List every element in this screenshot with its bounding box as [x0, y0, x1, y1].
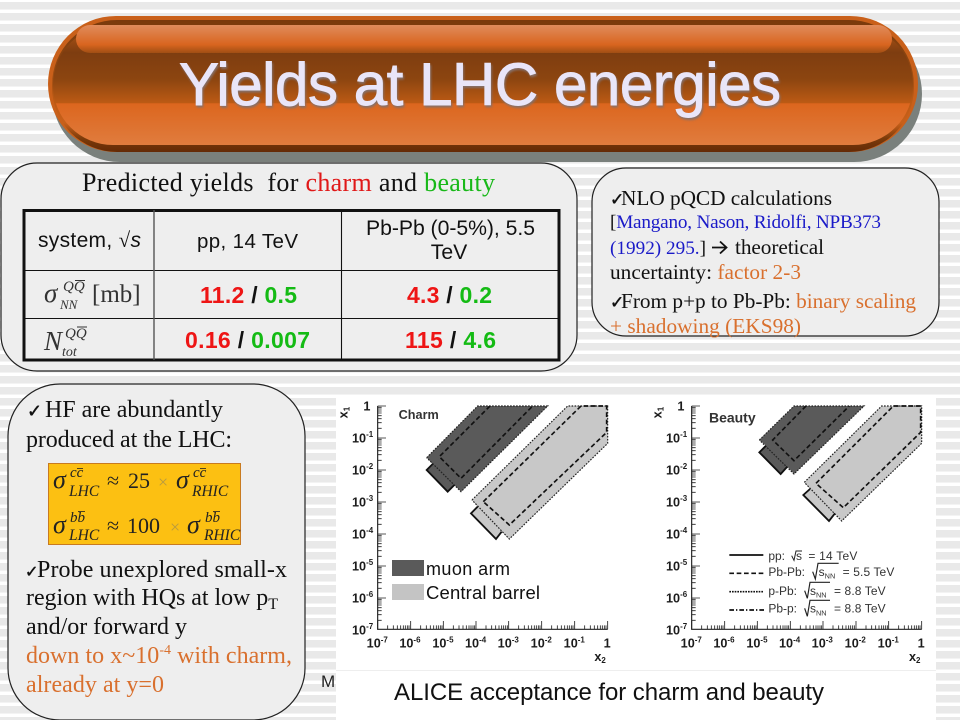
charm: axis titles [337, 406, 606, 665]
charm: x axis labels: 10 [399, 637, 413, 651]
beauty: line style legend: pp: [768, 549, 785, 563]
formula box: × [158, 472, 168, 492]
beauty: y axis labels: -6 [680, 590, 688, 599]
formula box: × [170, 517, 180, 537]
formula box: bb [70, 510, 86, 526]
table header: Pb-Pb [366, 217, 535, 264]
beauty: axes [692, 406, 922, 629]
charm: x axis labels: -3 [512, 635, 519, 644]
charm: axis titles: 1 [343, 406, 352, 411]
table header: pp: pp, 14 TeV [197, 230, 298, 253]
yields table [23, 210, 560, 360]
charm: y axis labels: -1 [366, 430, 374, 439]
swatch: muon arm [392, 560, 424, 576]
beauty: line style legend: s [810, 602, 816, 616]
charm: x axis labels: -4 [479, 635, 487, 644]
charm: x axis labels: 10 [498, 637, 512, 651]
beauty: x axis labels: 10 [845, 637, 859, 651]
legend: regions [392, 559, 540, 603]
scaling line: From p+p to Pb-Pb: binary scaling [621, 289, 916, 313]
beauty: x axis labels: -1 [892, 635, 899, 644]
charm: y axis labels: 1 [363, 400, 370, 414]
formula box: σ [187, 510, 201, 539]
beauty: x axis labels: -2 [859, 635, 866, 644]
beauty: x axis labels: -7 [695, 635, 702, 644]
charm reach text [26, 643, 292, 698]
formula box: RHIC [191, 483, 229, 500]
check mark: ✓ [610, 293, 624, 313]
values: pp cross section: 11.2 / 0.5 [200, 282, 297, 308]
beauty: y axis labels: -4 [680, 526, 688, 535]
beauty: line style legend: = 8.8 TeV [834, 602, 886, 616]
beauty: y axis labels: -3 [680, 494, 688, 503]
beauty: x axis labels: -6 [727, 635, 735, 644]
charm: x axis labels: -6 [413, 635, 421, 644]
charm: y axis labels: 10 [352, 623, 366, 637]
charm reach text: down to x~10 [26, 643, 159, 669]
acceptance figure background [336, 396, 936, 720]
formula box: σ [53, 510, 67, 539]
swatch: central barrel [392, 584, 424, 600]
beauty: y axis labels: 10 [666, 623, 680, 637]
charm: x axis labels: -7 [381, 635, 388, 644]
beauty: x axis labels: -3 [826, 635, 833, 644]
formula box: σ [176, 465, 190, 494]
small-x text: Probe unexplored small-x [37, 557, 287, 583]
chart: beauty acceptance [651, 400, 925, 665]
charm reach text: with charm, [171, 643, 292, 669]
reference line 1: [Mangano, Nason, Ridolfi, NPB373 [610, 212, 881, 233]
charm: axis titles: 2 [601, 656, 606, 665]
charm: y axis labels: -4 [366, 526, 374, 535]
formula box: LHC [68, 527, 100, 544]
beauty: line style legend: s [810, 584, 816, 598]
arrow [712, 242, 726, 254]
panel heading: Predicted yields for charm and beauty [82, 168, 495, 197]
charm: muon arm region [427, 406, 548, 492]
figure caption [336, 670, 936, 720]
beauty: line style legend: = 14 TeV [808, 549, 857, 563]
beauty: x axis labels: 1 [918, 637, 925, 651]
charm: y axis labels: -3 [366, 494, 374, 503]
beauty: x axis labels: 10 [713, 637, 727, 651]
charm: x axis labels: 10 [465, 637, 479, 651]
row label: cross section: [mb] [92, 281, 141, 308]
panel: predicted yields [1, 163, 577, 371]
shadowing line: + shadowing (EKS98) [610, 314, 801, 338]
table header: Pb-Pb: TeV [431, 241, 468, 264]
check mark: ✓ [610, 190, 624, 210]
formula box: bb [205, 510, 220, 526]
beauty: central barrel region [803, 406, 922, 521]
table header: Pb-Pb: Pb-Pb (0-5%), 5.5 [366, 217, 535, 240]
formula box: ≈ [107, 513, 119, 538]
abundance text [26, 397, 232, 453]
chart: charm acceptance [337, 400, 611, 665]
panel: NLO calculations [592, 168, 939, 338]
beauty: muon arm region [759, 406, 864, 474]
check mark: ✓ [25, 562, 38, 581]
charm: y axis labels: -5 [366, 558, 374, 567]
charm: x axis labels: -2 [545, 635, 552, 644]
beauty: axis titles: x [651, 411, 665, 418]
label: central barrel: Central barrel [426, 582, 540, 603]
beauty: line style legend: s [819, 565, 825, 579]
small-x text [26, 557, 287, 640]
charm: axes [378, 406, 608, 629]
charm: central barrel region [471, 406, 608, 539]
beauty: y axis labels: 10 [666, 559, 680, 573]
charm: y axis labels: 10 [352, 463, 366, 477]
beauty: y axis labels: -2 [680, 462, 688, 471]
uncertainty line: uncertainty: factor 2-3 [610, 260, 801, 284]
beauty: x axis labels: 10 [746, 637, 760, 651]
beauty: x axis labels [681, 635, 925, 651]
row label: cross section: σ [44, 278, 59, 308]
small-x text: region with HQs at low p [26, 585, 268, 611]
small-x text: and/or forward y [26, 614, 187, 640]
charm: y axis labels: 10 [352, 527, 366, 541]
abundance text: produced at the LHC: [26, 427, 232, 453]
beauty: y axis labels: -5 [680, 558, 688, 567]
formula box: 25 [128, 468, 150, 493]
formula box: RHIC [203, 527, 241, 544]
charm: axis titles: x [337, 411, 351, 418]
beauty: line style legend: = 8.8 TeV [834, 584, 886, 598]
charm reach text: already at y=0 [26, 672, 164, 698]
abundance text: HF are abundantly [45, 397, 223, 423]
charm: y axis labels [352, 400, 374, 637]
formula box: LHC [68, 483, 100, 500]
beauty: x axis labels: -5 [760, 635, 768, 644]
charm: x axis labels: 10 [531, 637, 545, 651]
beauty: y axis labels: 1 [677, 400, 684, 414]
beauty: x axis labels: 10 [812, 637, 826, 651]
beauty: line style legend: = 5.5 TeV [843, 565, 894, 579]
charm: y axis labels: 10 [352, 431, 366, 445]
charm: axis titles: x [594, 650, 601, 664]
beauty: line style legend: Pb-p: [768, 602, 797, 616]
table header: system: system, √s [38, 228, 142, 252]
reference line 2: (1992) 295.] [610, 238, 706, 259]
row label: cross section: QQ [63, 279, 85, 295]
charm: x axis labels: -1 [578, 635, 585, 644]
beauty: line style legend: s [796, 549, 802, 563]
charm: y axis labels: -2 [366, 462, 374, 471]
beauty: line style legend: NN [825, 572, 835, 581]
row label: total yield: QQ [65, 326, 87, 342]
check mark: ✓ [27, 401, 42, 422]
beauty: x axis labels: -4 [793, 635, 801, 644]
theoretical: theoretical [735, 235, 824, 259]
beauty: y axis labels: 10 [666, 495, 680, 509]
charm: x axis labels: 10 [367, 637, 381, 651]
clipped footer letter: M [321, 672, 335, 691]
beauty: axis titles: 2 [916, 656, 921, 665]
beauty: y axis labels: -1 [680, 430, 688, 439]
beauty: x axis labels: 10 [779, 637, 793, 651]
beauty: y axis labels: 10 [666, 527, 680, 541]
beauty: y axis labels [666, 400, 688, 637]
beauty: y axis labels: 10 [666, 591, 680, 605]
NLO text: NLO pQCD calculations [621, 186, 832, 210]
beauty: x axis labels: 10 [878, 637, 892, 651]
charm reach text: -4 [159, 643, 171, 658]
title text: Yields at LHC energies [179, 51, 781, 118]
formula box: cc [70, 465, 84, 481]
panel: heavy flavour at LHC [8, 384, 305, 720]
charm: x axis labels: -5 [446, 635, 454, 644]
charm: y axis labels: -7 [366, 622, 374, 631]
beauty: plot title: Beauty [709, 409, 756, 425]
label: muon arm: muon arm [426, 559, 510, 579]
formula box: 100 [127, 513, 160, 538]
beauty: axis titles [651, 406, 921, 665]
beauty: line style legend: Pb-Pb: [768, 565, 805, 579]
beauty: line style legend: NN [816, 608, 827, 617]
beauty: y axis labels: 10 [666, 463, 680, 477]
charm: x axis labels: 1 [604, 637, 611, 651]
beauty: axis titles: 1 [657, 406, 666, 411]
charm: y axis labels: -6 [366, 590, 374, 599]
values: PbPb yield: 115 / 4.6 [405, 327, 496, 353]
row label: cross section [44, 278, 141, 312]
title banner [48, 16, 922, 162]
beauty: y axis labels: -7 [680, 622, 688, 631]
beauty: x axis labels: 10 [681, 637, 695, 651]
beauty: line style legend [729, 549, 894, 617]
beauty: line style legend: p-Pb: [768, 584, 797, 598]
beauty: line style legend: NN [816, 591, 827, 600]
values: pp yield: 0.16 / 0.007 [185, 327, 310, 353]
row label: cross section: NN [59, 297, 79, 312]
charm: x axis labels [367, 635, 611, 651]
row label: total yield [43, 326, 87, 360]
charm: x axis labels: 10 [432, 637, 446, 651]
row label: total yield: N [43, 326, 64, 356]
beauty: y axis labels: 10 [666, 431, 680, 445]
formula box: ≈ [107, 468, 119, 493]
small-x text: T [268, 596, 278, 613]
formula box [48, 464, 241, 544]
caption text: ALICE acceptance for charm and beauty [394, 679, 824, 706]
charm: plot title: Charm [399, 408, 439, 422]
formula box: σ [53, 465, 67, 494]
charm: y axis labels: 10 [352, 591, 366, 605]
row label: total yield: tot [62, 345, 78, 360]
beauty: axis titles: x [909, 650, 916, 664]
values: PbPb cross section: 4.3 / 0.2 [407, 282, 492, 308]
charm: y axis labels: 10 [352, 559, 366, 573]
charm: x axis labels: 10 [564, 637, 578, 651]
formula box: cc [193, 465, 207, 481]
charm: y axis labels: 10 [352, 495, 366, 509]
